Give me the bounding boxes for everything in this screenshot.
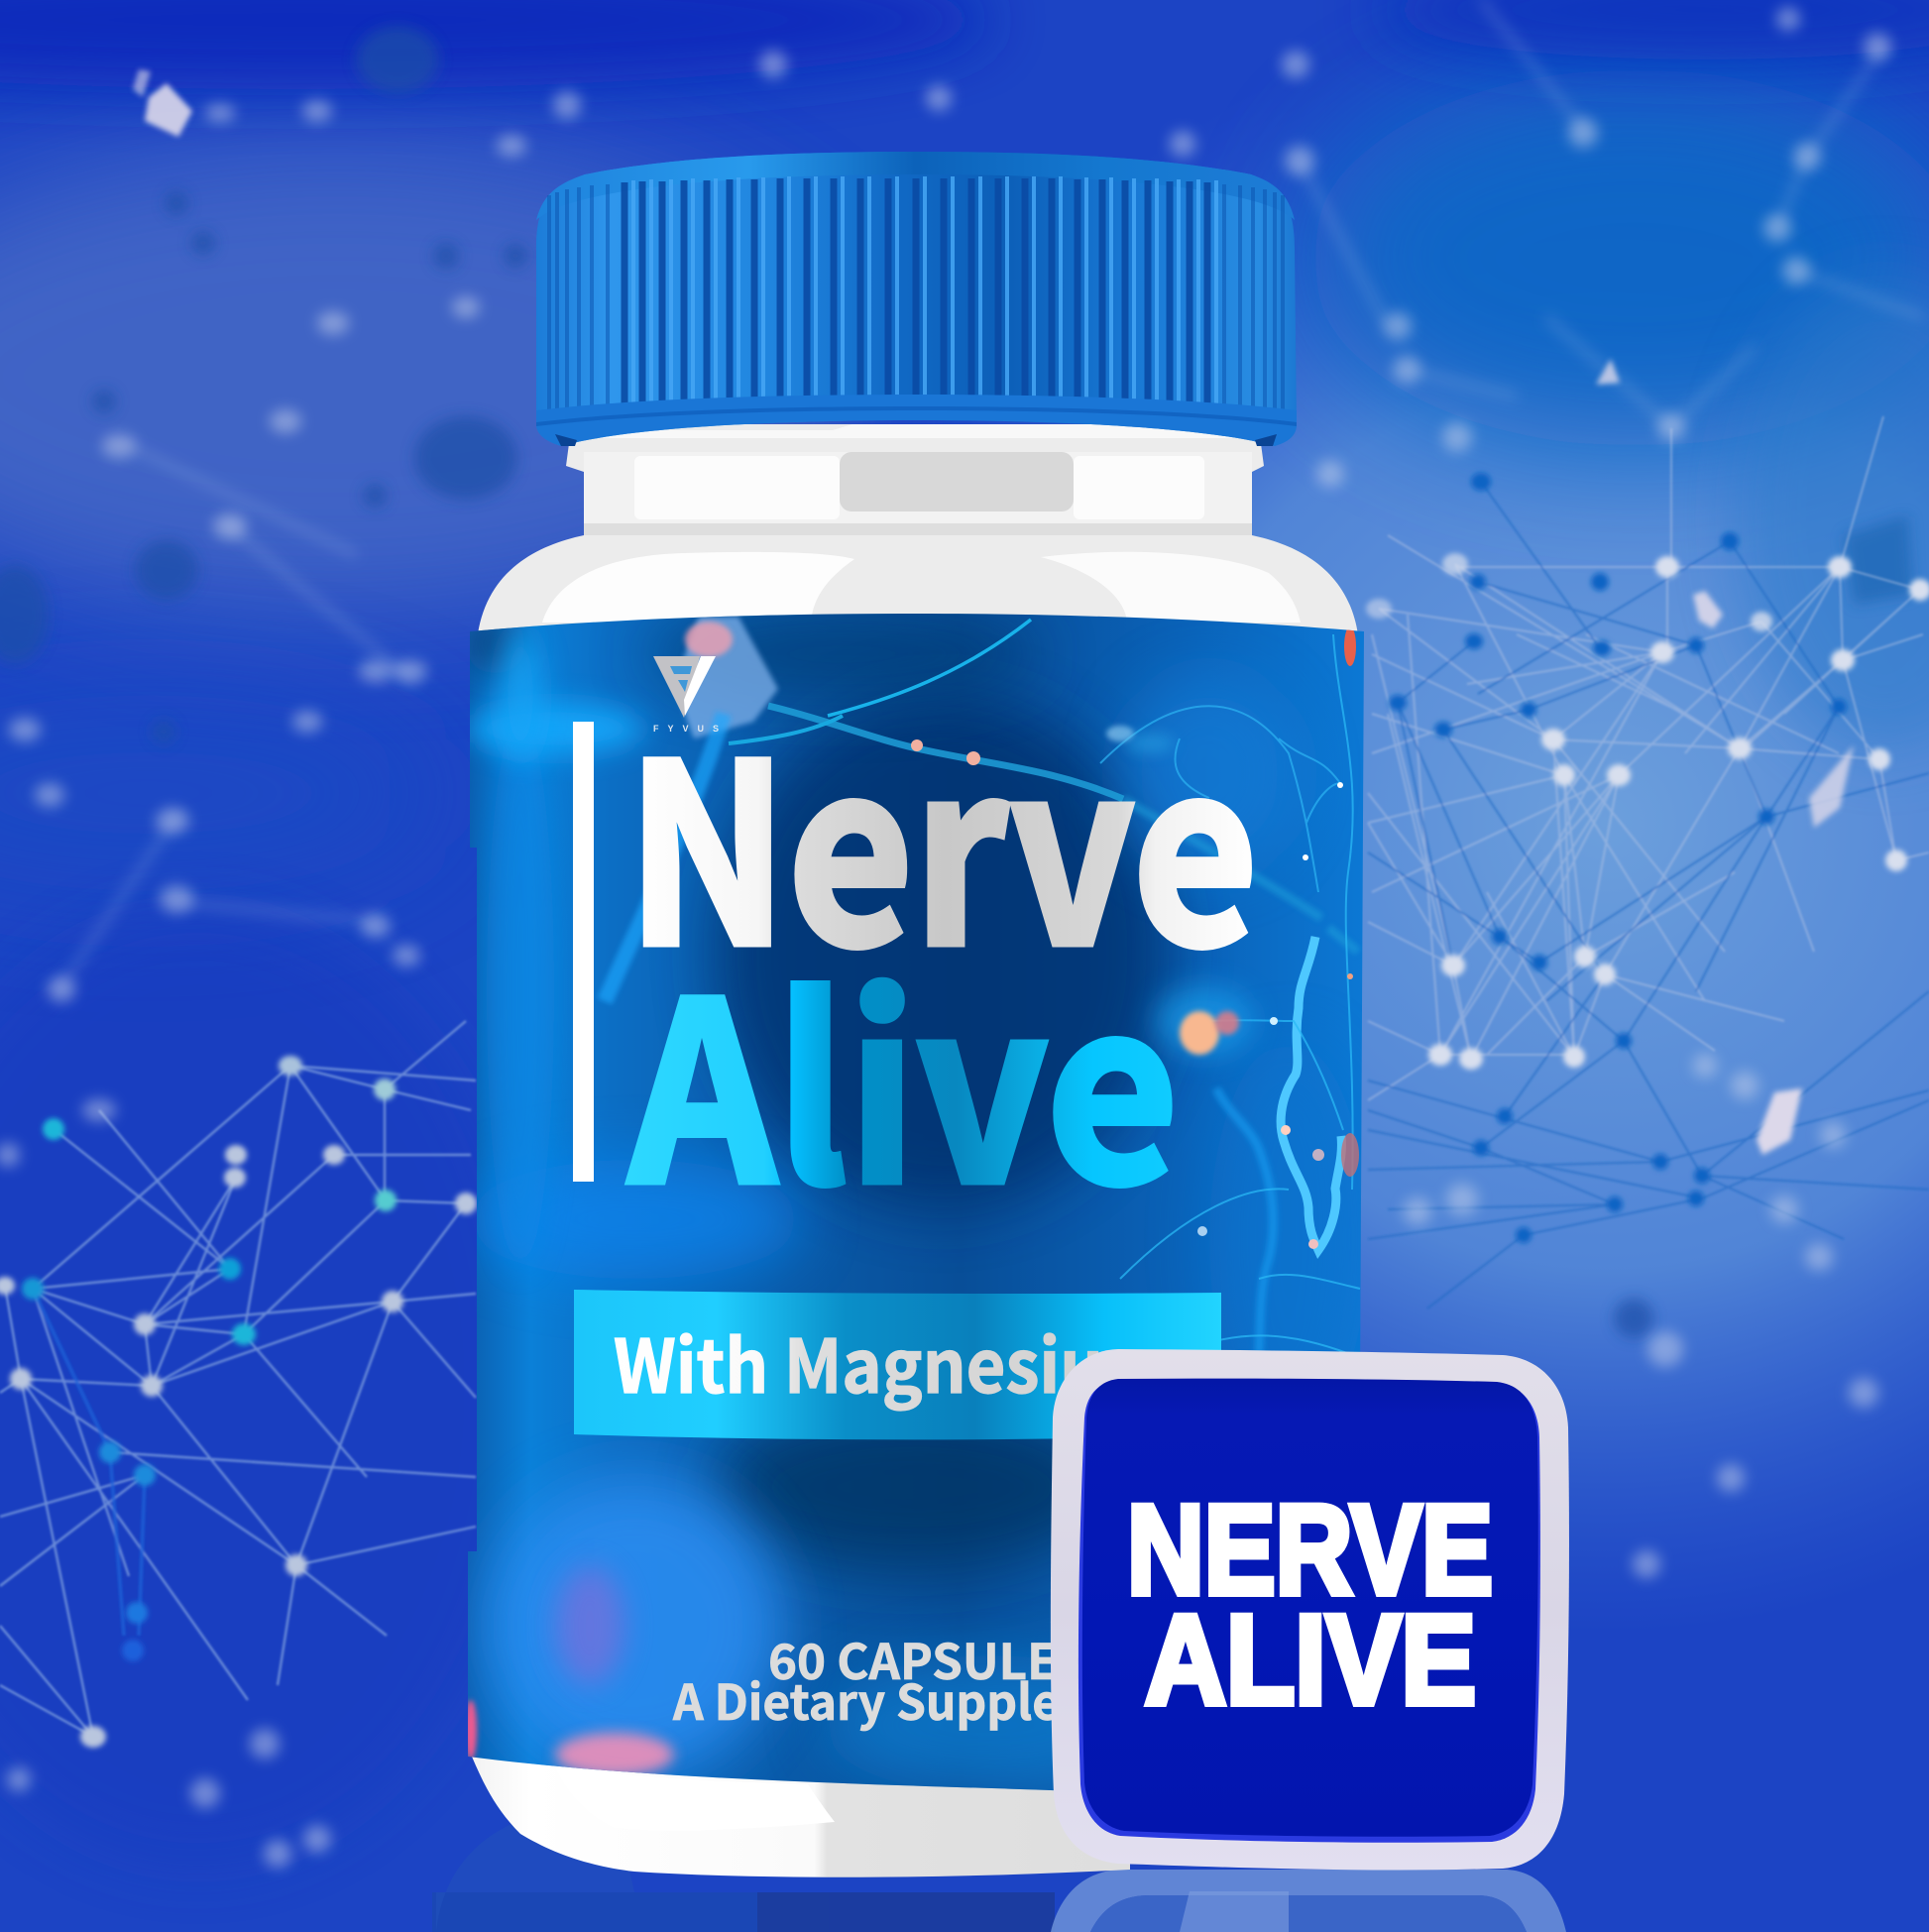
capsule count: 60 CAPSULES: [768, 1624, 1087, 1694]
background: network nodes: [0, 473, 1929, 1748]
brand logo: FYVUS: FYVUS: [653, 724, 719, 734]
dietary supplement line: A Dietary Supplement: [672, 1664, 1184, 1735]
stage and reflection at the bottom: [432, 1804, 1566, 1932]
bottle base: [472, 1757, 1130, 1877]
cap ribs: light ridges: [633, 176, 1216, 409]
badge: NERVE ALIVE: [1051, 1349, 1569, 1870]
product name: Nerve: Nerve: [626, 656, 1258, 1015]
badge wordmark: [1127, 1479, 1493, 1731]
bottle cap: [536, 152, 1297, 446]
band: With Magnesium: With Magnesium: [614, 1308, 1169, 1415]
bottle: [456, 152, 1378, 1877]
bottle body: neck and shoulder: [478, 424, 1358, 634]
brand logo: FYVUS: [653, 656, 719, 734]
cap ribs: outer grooves: [549, 184, 1283, 414]
cap ribs: dark grooves: [624, 178, 1207, 408]
background: bright floating flakes: [133, 69, 1854, 1155]
badge wordmark: ALIVE: [1145, 1590, 1476, 1731]
neuron cell and axon artwork: [605, 617, 1360, 1358]
label accent bar: [573, 722, 594, 1182]
background: dark blurred spheres: [0, 26, 1913, 1338]
badge wordmark: NERVE: [1127, 1479, 1493, 1622]
label: [456, 605, 1378, 1814]
band: With Magnesium: [574, 1290, 1221, 1439]
product name: Alive: Alive: [628, 894, 1179, 1253]
